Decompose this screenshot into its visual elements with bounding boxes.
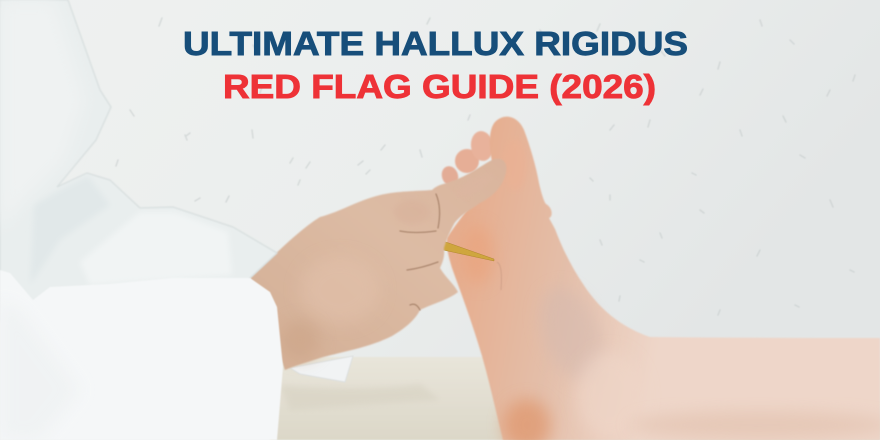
toes bbox=[439, 130, 495, 188]
finger creases bbox=[400, 194, 440, 310]
bench cushion bbox=[270, 357, 880, 440]
cuff fold highlight bbox=[80, 212, 232, 285]
hand bbox=[250, 159, 506, 370]
arch shading bbox=[527, 278, 617, 392]
title bbox=[183, 25, 688, 105]
upper sleeve highlight bbox=[0, 0, 85, 230]
white coat bbox=[0, 0, 283, 440]
title line 2: RED FLAG GUIDE (2026) bbox=[223, 68, 656, 105]
title line 1: ULTIMATE HALLUX RIGIDUS bbox=[183, 25, 688, 62]
coat base bbox=[0, 0, 277, 320]
heel warm tint bbox=[503, 399, 551, 440]
lower sleeve bbox=[0, 270, 283, 440]
coat sleeve inner cuff bbox=[290, 356, 353, 382]
shaded fold bbox=[30, 176, 110, 285]
foot sole and leg bbox=[439, 117, 880, 440]
needle tool bbox=[443, 241, 494, 261]
